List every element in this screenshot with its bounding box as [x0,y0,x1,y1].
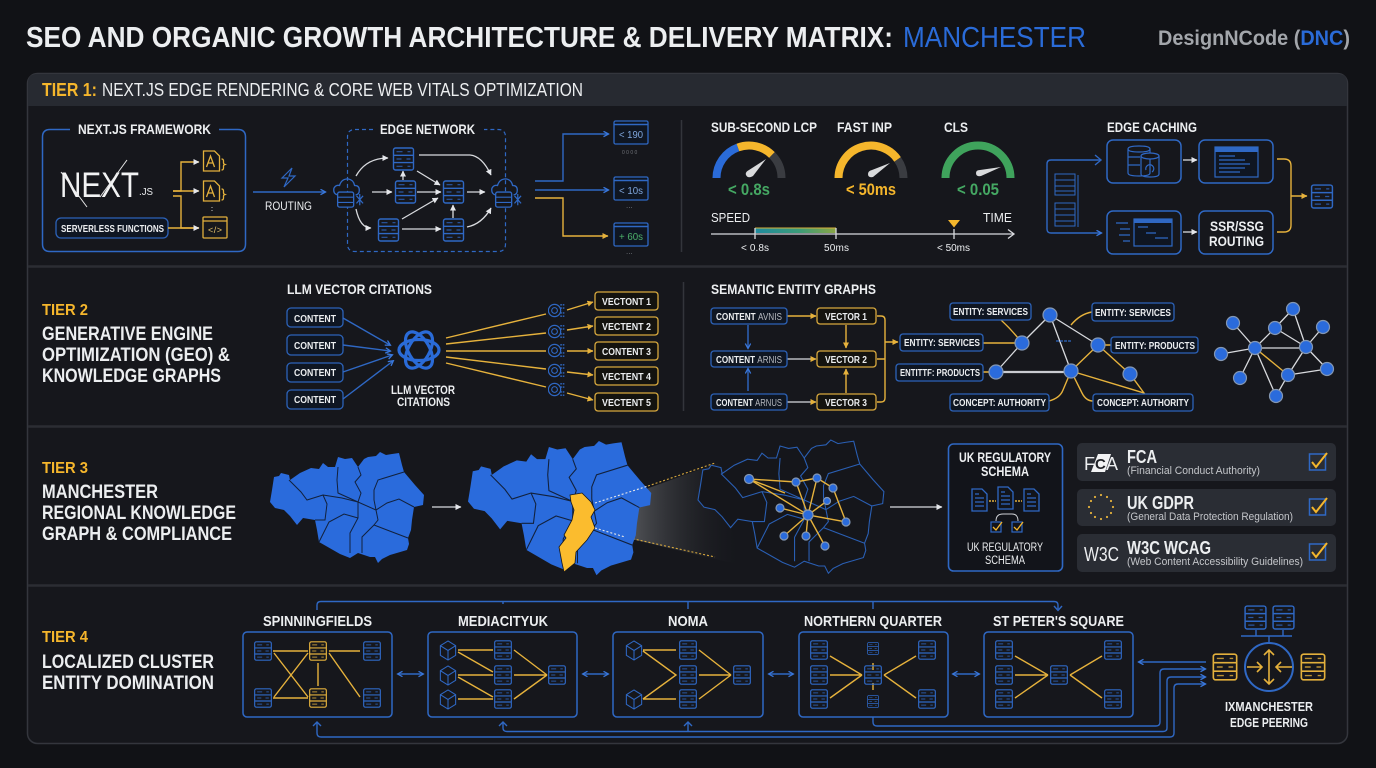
routing arrow [253,168,325,213]
next.js framework box: NEXT.JS FRAMEWORK [78,121,211,137]
content chips: CONTENT [294,340,336,352]
tier 1 heading: NEXT.JS EDGE RENDERING & CORE WEB VITALS OPTIMIZATION [102,80,583,100]
next.js logo: .JS [139,187,153,198]
edge network: EDGE NETWORK [380,121,475,137]
entity chips: ENTITY: SERVICES [1095,308,1171,319]
title: MANCHESTER [903,22,1086,54]
cluster: northern quarter [799,613,948,717]
cdn output windows: < 190 [619,130,643,141]
vector chips: CONTENT 3 [602,346,651,358]
ssr/ssg routing box [1199,211,1273,254]
content arrows [343,318,393,399]
ssr/ssg routing box: ROUTING [1209,233,1264,249]
brand: DesignNCode (DNC) [1158,27,1350,50]
small network graph [1214,302,1334,402]
entity chips: ENTITTF: PRODUCTS [900,368,980,379]
tier 4 heading: LOCALIZED CLUSTER [42,652,214,673]
cache arrows [1183,160,1197,232]
entity graph edges [983,312,1144,401]
next.js framework box [42,121,246,252]
tier 2 heading: KNOWLEDGE GRAPHS [42,366,221,387]
semantic entity graphs flow: SEMANTIC ENTITY GRAPHS [711,281,876,297]
cluster: mediacityuk [428,613,577,717]
function file icons: </> [208,225,222,235]
content and vector chips: CONTENT ARNIS [716,355,782,366]
tier 1 heading: TIER 1: [42,80,97,100]
code box [1107,211,1181,254]
vector chips: VECTENT 4 [602,371,651,383]
compliance card: w3c wcag [1077,534,1336,572]
routing arrow: ROUTING [265,199,312,213]
content chips: CONTENT [294,367,336,379]
gauge: cls [944,119,1010,199]
entity chips [896,303,1198,411]
content and vector chips: CONTENT AVNIS [716,312,782,323]
arrow [432,506,461,508]
zoom cone [623,463,740,565]
cluster: noma: NOMA [668,613,708,630]
llm label: LLM VECTOR [391,383,455,397]
llm knot icon [399,327,439,373]
speed timeline: < 50ms [937,243,970,254]
cdn output windows [614,121,648,256]
entity chips: ENTITY: SERVICES [953,307,1028,318]
cdn output windows: ... [626,201,633,210]
content and vector chips: VECTOR 3 [825,397,867,409]
compliance card: fca [1077,443,1336,481]
cdn output windows: < 10s [619,186,643,197]
edge network [334,121,521,252]
content and vector chips: VECTOR 2 [825,354,867,366]
tier 4 heading [42,629,214,694]
gauge: fast inp: < 50ms [846,180,896,199]
tier 2 heading [42,302,230,387]
tier 3 heading: REGIONAL KNOWLEDGE [42,503,236,524]
tier 3 heading: GRAPH & COMPLIANCE [42,524,232,545]
tier 2 heading: GENERATIVE ENGINE [42,324,213,345]
serverless functions chip [56,218,168,238]
content to vector links [748,316,898,402]
llm vector citations flow [287,281,658,411]
next.js logo: NEXT [60,166,139,205]
map: highlighted corridor [468,441,651,575]
divider [682,282,684,411]
arrow [890,506,942,508]
cluster: st peter's square: ST PETER'S SQUARE [993,613,1124,630]
uk regulatory schema card: SCHEMA [985,555,1025,567]
tier 1 header band [28,74,1347,106]
merged server [1312,185,1332,208]
divider [680,120,682,252]
tier 2 heading: OPTIMIZATION (GEO) & [42,345,230,366]
cluster: st peter's square [984,613,1133,717]
compliance card: w3c wcag: (Web Content Accessibility Guidelines) [1127,556,1303,568]
merge bracket [1277,159,1307,232]
cluster: northern quarter: NORTHERN QUARTER [804,613,942,630]
uk regulatory schema card: SCHEMA [981,464,1029,479]
tier 3 heading: MANCHESTER [42,482,158,503]
map: dotted lines [595,486,648,537]
content chips [287,308,343,409]
uk regulatory schema card: UK REGULATORY [959,450,1051,465]
entity chips: CONCEPT: AUTHORITY [953,398,1046,409]
vector chips [595,292,658,411]
cluster: noma [613,613,763,717]
compliance card: fca: C [1095,456,1106,473]
speed timeline: SPEED [711,210,750,225]
vector chips: VECTENT 2 [602,321,651,333]
cluster: spinningfields: SPINNINGFIELDS [263,613,372,630]
ixmanchester edge peering: IXMANCHESTER [1225,699,1314,714]
compliance card: fca: (Financial Conduct Authority) [1127,465,1260,477]
title: SEO AND ORGANIC GROWTH ARCHITECTURE & DELIVERY MATRIX: [26,22,893,54]
entity chips: ENTITY: SERVICES [904,338,980,349]
gauge: cls: CLS [944,119,968,135]
compliance card: w3c wcag: W3C [1084,544,1119,566]
llm vector citations flow: LLM VECTOR CITATIONS [287,281,432,297]
cluster: mediacityuk: MEDIACITYUK [458,613,548,630]
cluster: spinningfields [243,613,392,717]
gold vector lines [446,314,546,387]
entity graph nodes [989,308,1137,381]
tier 2 panel [42,281,1334,411]
cdn output windows: ... [626,247,633,256]
tier 1 panel [28,74,1347,256]
map: wire knowledge graph [698,440,884,573]
vector chips: VECTONT 1 [602,296,651,308]
tier 4 panel [42,601,1325,737]
tier 3 heading [42,460,236,545]
cache database box [1107,140,1181,183]
gauge: sub-second lcp: < 0.8s [728,180,770,199]
speed timeline [711,210,1014,254]
gauge: sub-second lcp: SUB-SECOND LCP [711,119,817,135]
edge caching [1047,119,1332,254]
schema icons [972,487,1039,532]
top feedback line [317,601,1062,610]
tier 4 heading: TIER 4 [42,629,88,646]
content chips: CONTENT [294,394,336,406]
tier 4 heading: ENTITY DOMINATION [42,673,214,694]
compliance card: fca: A [1106,454,1118,474]
speed timeline: TIME [983,210,1012,225]
vector chips: VECTENT 5 [602,397,651,409]
speed timeline: < 0.8s [741,243,769,254]
function file icons [203,151,227,238]
cdn output windows: + 60s [619,232,643,243]
uk regulatory schema card: UK REGULATORY [967,542,1043,554]
compliance card: w3c wcag: W3C WCAG [1127,538,1211,558]
edge servers [334,148,521,241]
map: greater manchester [270,452,424,563]
function connectors [168,162,199,228]
compliance card: uk gdpr [1077,489,1336,526]
entity chips: ENTITY: PRODUCTS [1115,341,1195,352]
cdn output windows: 0 0 0 0 [622,150,638,156]
content and vector chips: CONTENT ARNUS [716,398,782,409]
bottom peering lines [313,662,1206,737]
connector arrows between clusters [398,673,979,675]
edge flow arrows [356,155,491,229]
compliance card: fca: F [1084,454,1095,474]
ssr/ssg routing box: SSR/SSG [1210,218,1264,234]
gauge: fast inp: FAST INP [837,119,892,135]
compliance card: fca: FCA [1127,447,1157,467]
content chips: CONTENT [294,313,336,325]
gauge: fast inp [837,119,904,199]
tier 2 heading: TIER 2 [42,302,88,319]
ixmanchester edge peering: EDGE PEERING [1230,715,1308,730]
output connectors [535,134,608,236]
cache source docs and bracket [1047,155,1101,233]
vector chip icons [548,304,565,396]
cache page box [1199,140,1273,183]
tier 3 heading: TIER 3 [42,460,88,477]
semantic entity graphs flow [711,281,1198,411]
edge caching: EDGE CACHING [1107,119,1197,135]
llm label: CITATIONS [397,395,450,409]
content and vector chips: VECTOR 1 [825,311,867,323]
compliance card: uk gdpr: (General Data Protection Regulation) [1127,511,1293,523]
tier 3 panel [42,440,1336,575]
serverless functions chip: SERVERLESS FUNCTIONS [61,223,164,235]
entity chips: CONCEPT: AUTHORITY [1097,398,1189,409]
compliance card: uk gdpr: UK GDPR [1127,493,1194,513]
uk regulatory schema card [948,444,1062,571]
speed timeline: 50ms [824,243,849,254]
vector arrows [567,302,593,400]
gauge: cls: < 0.05 [957,180,999,199]
content and vector chips [711,308,876,410]
gauge: sub-second lcp [711,119,817,199]
ixmanchester edge peering [1213,606,1325,730]
llm label [391,383,455,409]
